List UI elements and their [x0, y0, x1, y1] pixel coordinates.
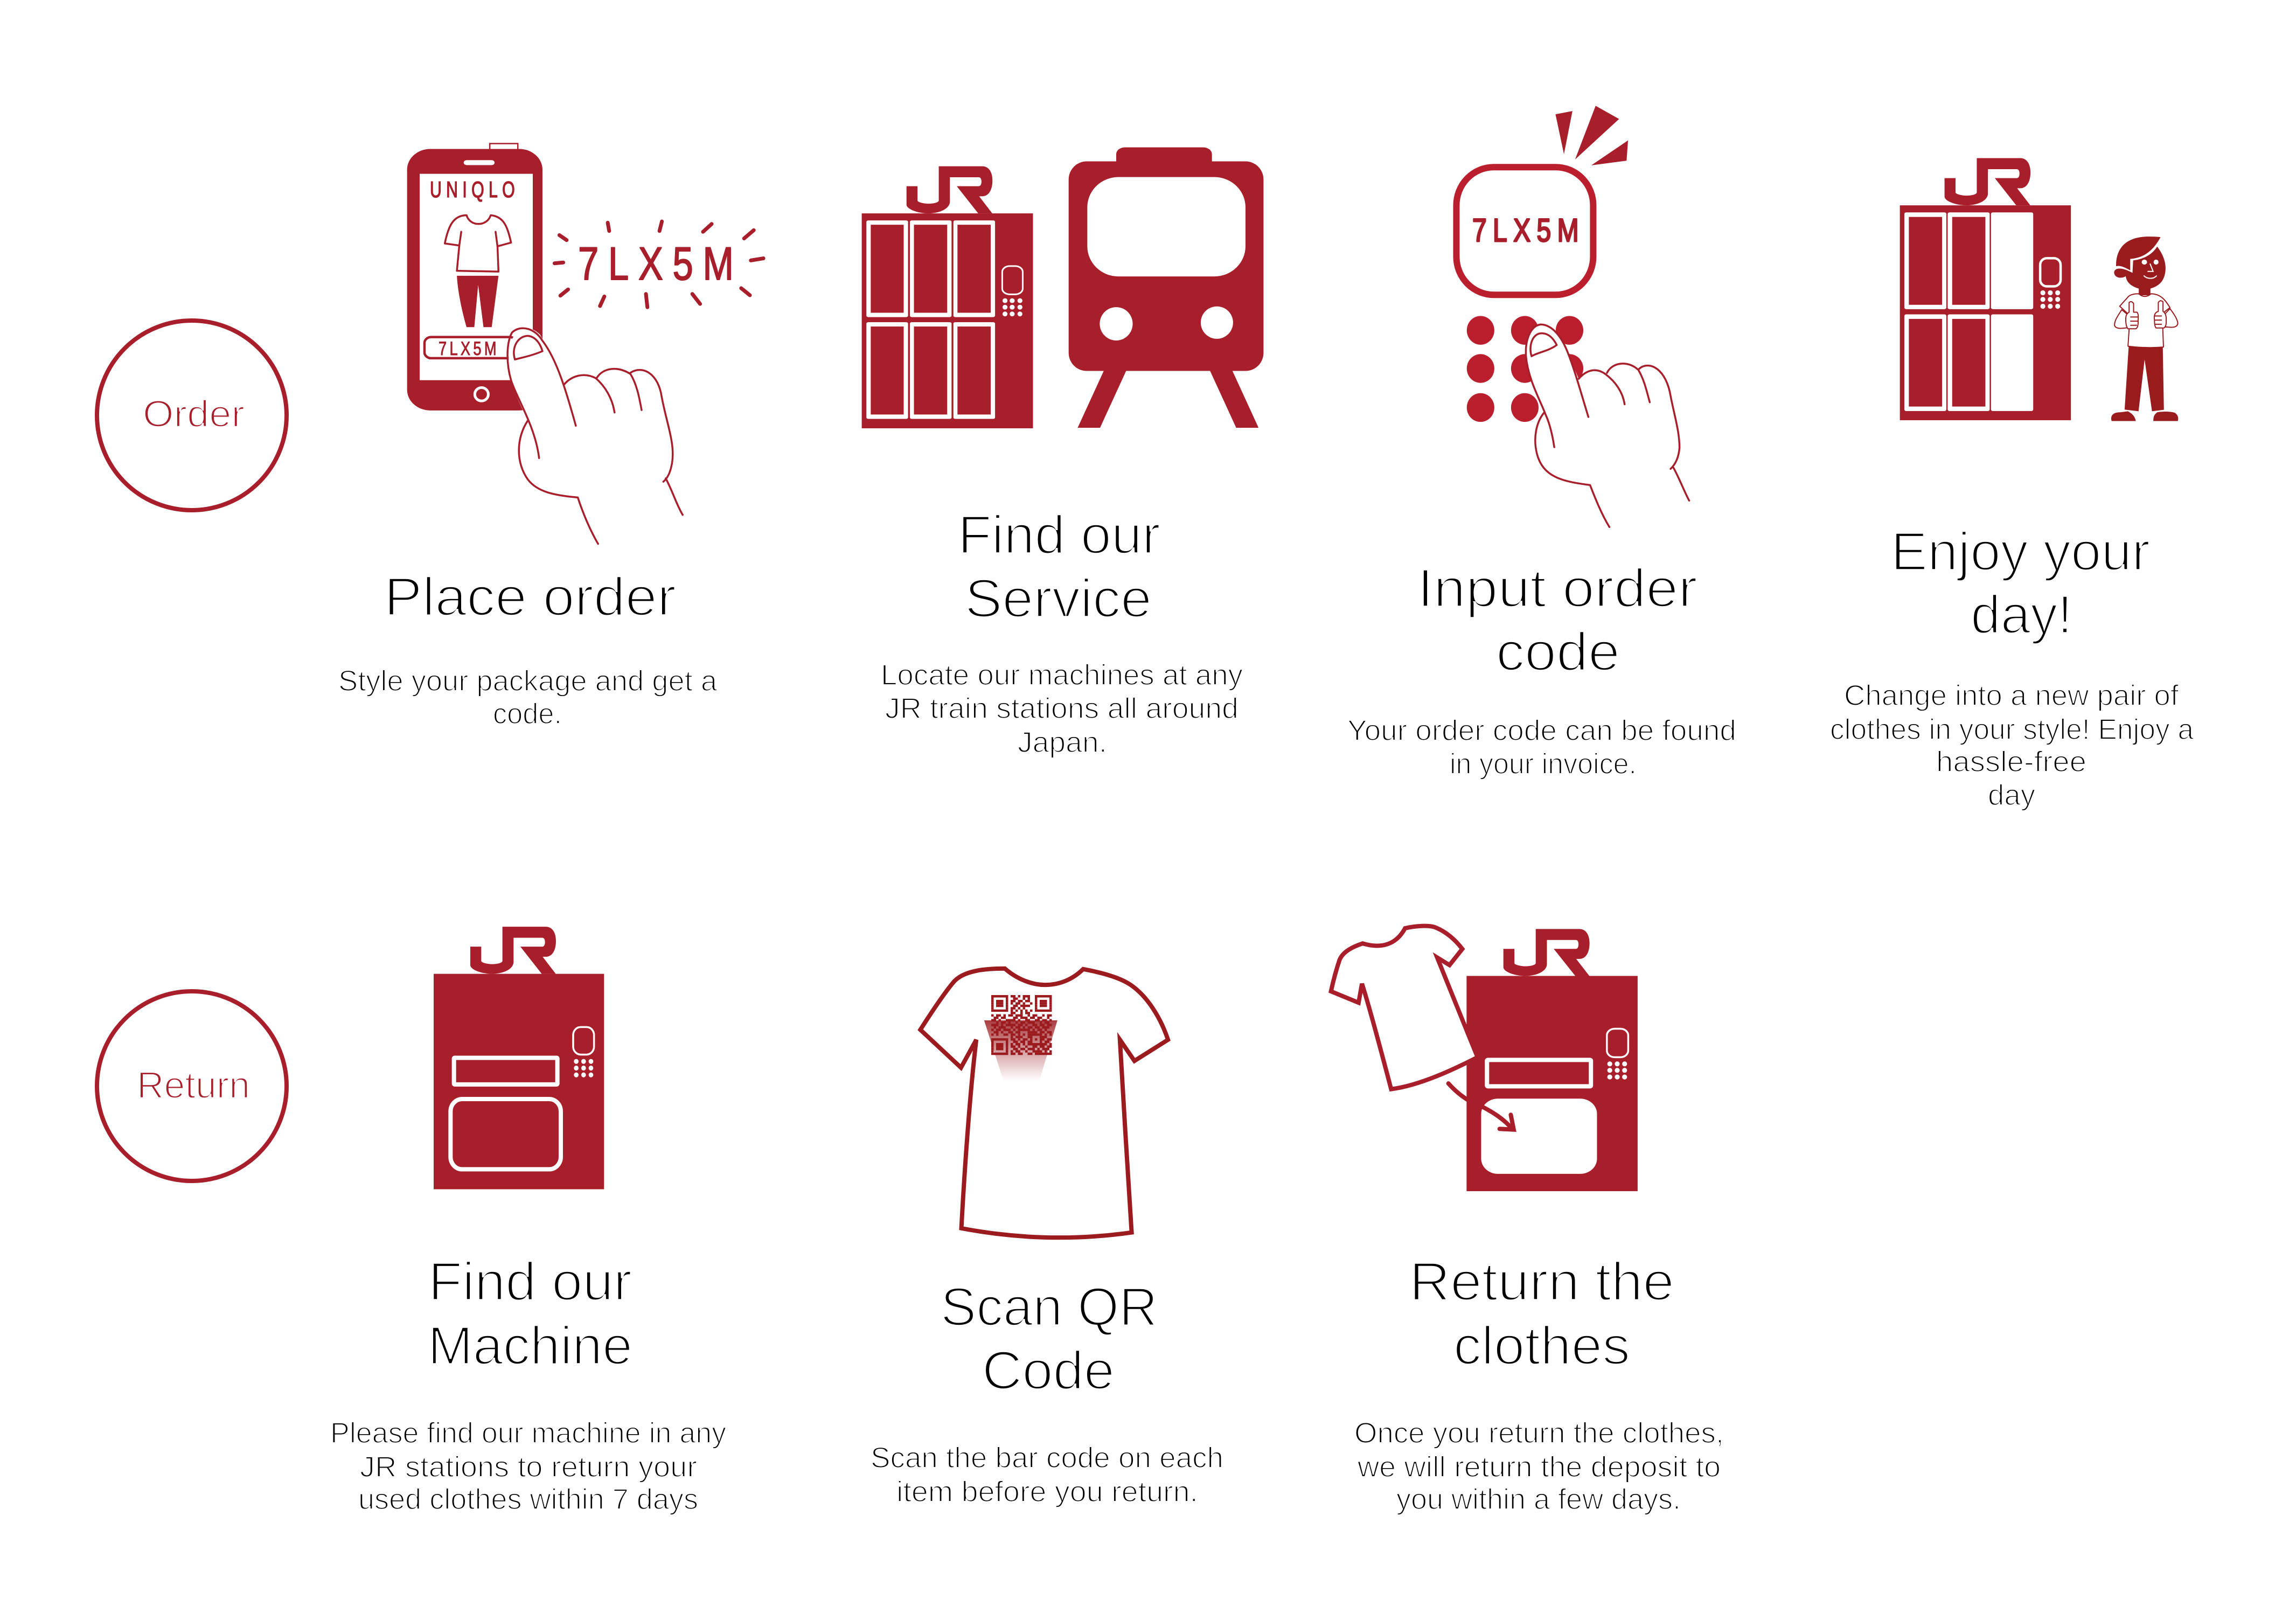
description: place order: code. — [493, 698, 562, 730]
title: find our service: Find our — [958, 505, 1160, 565]
title: input order code: Input order — [1417, 558, 1697, 618]
title: place order: Place order — [384, 567, 676, 627]
description: find our machine: used clothes within 7 days — [358, 1483, 698, 1515]
title: scan QR code — [941, 1277, 1158, 1401]
panel: enjoy your day — [1830, 158, 2194, 811]
icon: JR return machine — [434, 927, 604, 1189]
icon: keypad dots — [1467, 316, 1583, 422]
description: return the clothes: we will return the deposit to — [1357, 1451, 1721, 1483]
section badge: Order — [97, 321, 287, 510]
icon: phone with outfit and order code: UNIQLO — [430, 177, 515, 202]
description: enjoy your day: day — [1988, 779, 2035, 811]
icon: QR code — [991, 996, 1052, 1054]
icon: t-shirt going into machine — [1331, 926, 1478, 1089]
description: find our service — [881, 659, 1243, 759]
section badge: Return: Return — [137, 1064, 250, 1106]
description: place order: Style your package and get a — [338, 665, 718, 697]
panel: input order code — [1347, 106, 1736, 780]
icon: person with thumbs up — [2111, 237, 2178, 421]
panel: find our machine — [330, 927, 726, 1515]
title: enjoy your day — [1891, 522, 2150, 645]
big order code with rays: 7LX5M — [578, 238, 734, 290]
description: find our machine: JR stations to return your — [360, 1451, 697, 1483]
title: scan QR code: Code — [982, 1340, 1115, 1401]
icon: JR locker machine — [862, 166, 1033, 428]
title: find our service — [958, 505, 1160, 629]
title: scan QR code: Scan QR — [941, 1277, 1158, 1337]
description: enjoy your day: hassle-free — [1936, 746, 2086, 778]
title: find our machine — [428, 1252, 632, 1376]
title: return the clothes: clothes — [1453, 1316, 1630, 1376]
description: scan QR code: item before you return. — [896, 1476, 1198, 1508]
title: return the clothes — [1409, 1252, 1674, 1376]
title: enjoy your day: Enjoy your — [1891, 522, 2150, 582]
icon: phone with outfit and order code — [407, 143, 542, 411]
title: return the clothes: Return the — [1409, 1252, 1674, 1312]
icon: t-shirt outline — [920, 969, 1168, 1237]
icon: locker machine with two doors open — [1900, 158, 2071, 420]
icon: code display with burst — [1456, 106, 1628, 295]
panel: find our service — [862, 147, 1263, 759]
description: find our service: Locate our machines at any — [881, 659, 1243, 691]
description: return the clothes: you within a few days. — [1396, 1483, 1681, 1515]
description: find our machine — [330, 1417, 726, 1515]
icon: return machine with open tray — [1466, 929, 1638, 1191]
title: find our machine: Machine — [428, 1316, 632, 1376]
icon: scanner light beam — [984, 1020, 1057, 1081]
icon: code display with burst: 7LX5M — [1472, 212, 1579, 248]
description: place order — [338, 665, 718, 730]
title: input order code: code — [1496, 622, 1620, 682]
description: enjoy your day — [1830, 679, 2194, 811]
title: find our machine: Find our — [428, 1252, 632, 1312]
section badge: Return — [97, 991, 287, 1181]
title: enjoy your day: day! — [1971, 585, 2072, 645]
panel: return the clothes — [1331, 926, 1724, 1515]
icon: pointing hand on keypad — [1526, 324, 1689, 527]
section badge: Order: Order — [143, 393, 245, 435]
panel: place order — [338, 143, 763, 730]
description: input order code: Your order code can be found — [1347, 714, 1736, 747]
panel: scan QR code — [871, 969, 1223, 1508]
description: return the clothes — [1354, 1417, 1724, 1515]
description: find our machine: Please find our machine in any — [330, 1417, 726, 1449]
description: find our service: Japan. — [1018, 726, 1107, 759]
description: scan QR code: Scan the bar code on each — [871, 1442, 1223, 1474]
arrow: into return tray — [1449, 1083, 1514, 1130]
description: find our service: JR train stations all around — [885, 692, 1239, 725]
icon: phone with outfit and order code: 7LX5M — [439, 338, 497, 359]
big order code with rays — [554, 221, 763, 307]
description: return the clothes: Once you return the clothes, — [1354, 1417, 1724, 1449]
description: enjoy your day: Change into a new pair of — [1844, 679, 2179, 712]
description: input order code — [1347, 714, 1736, 780]
title: find our service: Service — [965, 568, 1152, 629]
description: enjoy your day: clothes in your style! Enjoy a — [1830, 713, 2194, 746]
icon: train front — [1069, 147, 1263, 428]
title: input order code — [1417, 558, 1697, 682]
description: scan QR code — [871, 1442, 1223, 1508]
icon: pointing hand on phone — [507, 328, 683, 544]
description: input order code: in your invoice. — [1450, 748, 1637, 780]
